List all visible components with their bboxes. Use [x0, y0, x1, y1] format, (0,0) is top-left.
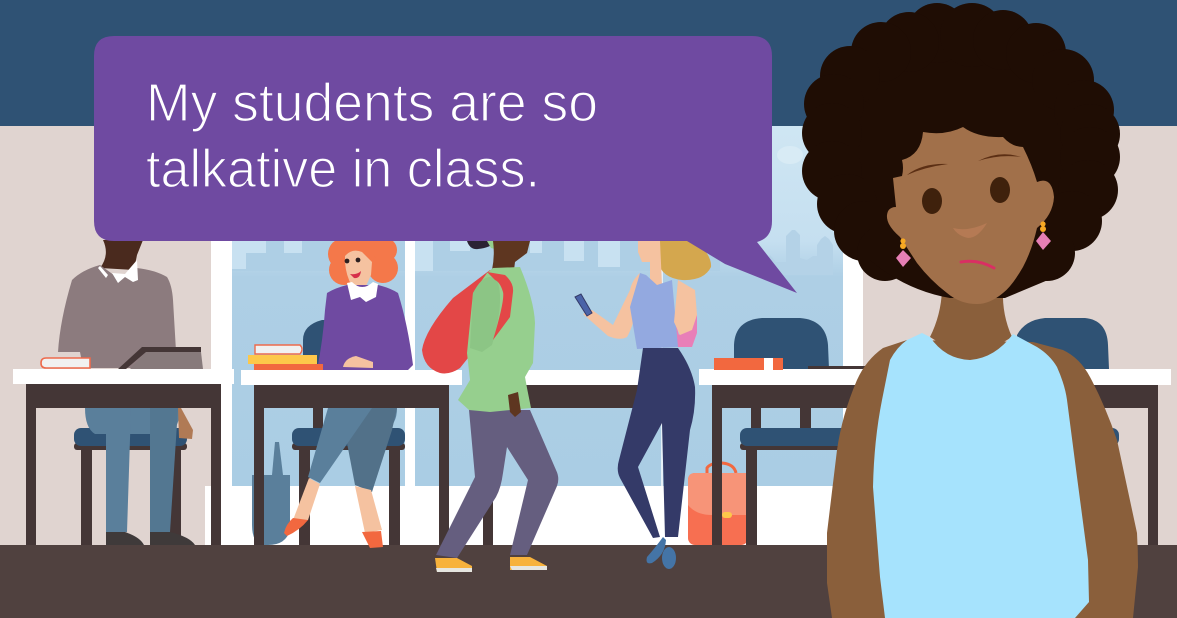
- shoes: [647, 537, 666, 563]
- arm: [583, 273, 640, 339]
- suitcase: [688, 463, 748, 545]
- hair: [658, 240, 711, 280]
- backpack: [422, 270, 513, 373]
- hair and hood: [467, 241, 497, 249]
- shoes: [435, 558, 472, 572]
- book: [41, 358, 90, 368]
- pants: [436, 410, 558, 558]
- far table between desks: [483, 370, 645, 545]
- chair at desk 3: [734, 318, 850, 545]
- far right chair: [1017, 318, 1119, 446]
- nose: [953, 223, 987, 238]
- face and neck: [638, 241, 662, 285]
- afro hair: [802, 3, 1120, 298]
- arms and shoulders: [827, 340, 1138, 618]
- bubble text: My students are so: [146, 73, 598, 133]
- face: [887, 127, 1054, 304]
- mouth: [961, 261, 994, 268]
- book: [714, 358, 783, 370]
- eyebrows: [907, 154, 1021, 175]
- top: [630, 273, 678, 349]
- books: [248, 345, 323, 370]
- hair: [328, 224, 398, 285]
- desk 2 with book stack: [241, 345, 462, 545]
- main woman: [802, 3, 1138, 618]
- desk 3 with book and laptop: [699, 358, 1171, 545]
- speech bubble: [94, 36, 797, 293]
- seated woman's chair: [292, 320, 405, 545]
- seated man: [58, 240, 195, 545]
- hoodie: [458, 267, 535, 412]
- window with city skyline: [232, 126, 843, 486]
- tablet: [118, 347, 203, 369]
- sleeveless top: [873, 333, 1089, 618]
- laptop edge: [808, 366, 868, 369]
- head: [492, 241, 530, 270]
- seated woman with red hair: [284, 224, 413, 548]
- earrings: [896, 221, 1051, 267]
- bubble text: talkative in class.: [146, 139, 540, 199]
- seated man's chair: [74, 428, 187, 545]
- legs: [328, 408, 397, 430]
- sweater: [317, 285, 413, 370]
- standing woman with phone: [575, 240, 711, 569]
- phone: [575, 294, 592, 316]
- eyes: [922, 177, 1010, 214]
- neck: [930, 290, 1012, 362]
- tote bag on floor: [252, 442, 290, 545]
- face: [345, 251, 372, 286]
- pink bag: [658, 284, 697, 347]
- desk 1 with book and tablet: [13, 347, 234, 545]
- walking student with backpack: [422, 241, 558, 572]
- leggings: [618, 348, 695, 538]
